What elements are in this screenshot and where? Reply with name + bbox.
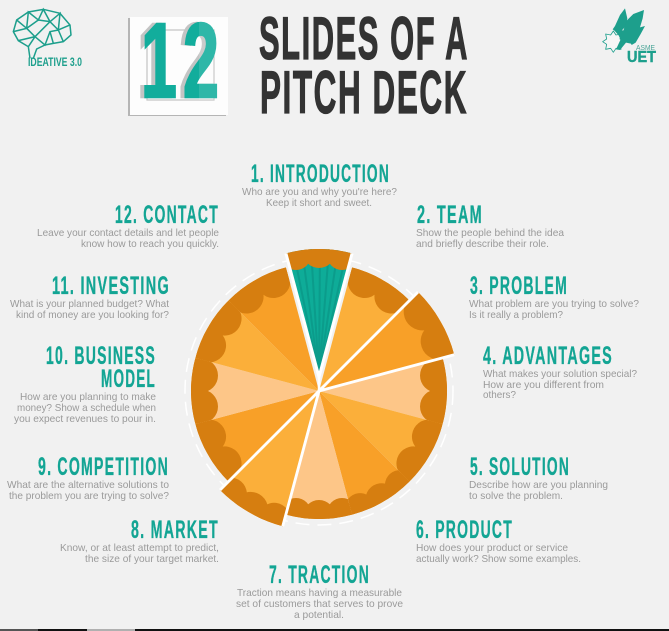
section 2: team (416, 202, 564, 250)
section 11: investing: What is your planned budget? What (10, 298, 169, 310)
section 6: product (416, 517, 581, 565)
slice 5 (154, 226, 496, 563)
section 1: introduction: 1. INTRODUCTION (251, 161, 390, 188)
logo: ASME UET: UET (627, 49, 656, 66)
section 8: market: the size of your target market. (85, 553, 219, 565)
slice 10 (184, 270, 440, 512)
section 4: advantages: What makes your solution special? (483, 368, 637, 380)
section 11: investing: kind of money are you looking for? (16, 309, 169, 321)
section 10: business model: you expect revenues to pour in. (14, 413, 156, 425)
slice 9 (142, 226, 484, 563)
section 2: team: Show the people behind the idea (416, 227, 564, 239)
section 9: competition (7, 454, 169, 502)
section 12: contact (37, 202, 219, 250)
section 8: market: Know, or at least attempt to predict, (60, 542, 219, 554)
title (259, 5, 469, 126)
section 6: product: How does your product or service (416, 542, 568, 554)
section 12: contact: know how to reach you quickly. (81, 238, 219, 250)
section 11: investing: 11. INVESTING (52, 273, 170, 300)
slice 7 (197, 269, 441, 532)
slice 4 (198, 270, 454, 512)
icon: number 12 tile: 12 (137, 2, 221, 120)
section 12: contact: 12. CONTACT (115, 202, 219, 229)
slice 6 (152, 224, 495, 574)
section 11: investing (10, 273, 170, 321)
section 5: solution (469, 454, 608, 502)
slice 12 (147, 214, 484, 556)
section 6: product: 6. PRODUCT (416, 517, 513, 544)
section 9: competition: the problem you are trying to solve? (9, 490, 169, 502)
section 2: team: 2. TEAM (417, 202, 483, 229)
slice 11 (142, 219, 484, 556)
section 8: market (60, 517, 219, 565)
section 4: advantages: others? (483, 389, 516, 401)
section 1: introduction: Who are you and why you're here? (242, 186, 397, 198)
slice 3 (pulled out) (138, 203, 513, 572)
title: SLIDES OF A (259, 5, 469, 72)
section 7: traction (236, 562, 403, 621)
logo: Ideative 3.0 brain (13, 9, 82, 69)
section 5: solution: Describe how are you planning (469, 479, 608, 491)
section 7: traction: 7. TRACTION (269, 562, 370, 589)
section 10: business model: money? Show a schedule when (17, 402, 156, 414)
section 1: introduction (242, 161, 397, 209)
section 3: problem: 3. PROBLEM (470, 273, 568, 300)
section 10: business model: MODEL (101, 366, 156, 393)
section 3: problem: Is it really a problem? (469, 309, 563, 321)
section 7: traction: a potential. (294, 609, 344, 621)
section 3: problem: What problem are you trying to solve? (469, 298, 639, 310)
bottom edge strip (0, 629, 669, 631)
section 7: traction: set of customers that serves to prove (236, 598, 403, 610)
slice 8 (pulled out) (126, 209, 501, 591)
pie chart (184, 249, 454, 526)
logo: ASME UET (603, 8, 656, 66)
title: PITCH DECK (260, 59, 468, 126)
section 5: solution: to solve the problem. (469, 490, 563, 502)
section 2: team: and briefly describe their role. (416, 238, 549, 250)
section 12: contact: Leave your contact details and let people (37, 227, 219, 239)
section 4: advantages: How are you different from (483, 379, 604, 391)
section 5: solution: 5. SOLUTION (470, 454, 570, 481)
section 1: introduction: Keep it short and sweet. (266, 197, 372, 209)
slice 1 (teal, pulled out) (284, 249, 354, 390)
logo: ASME UET: ASME (636, 43, 655, 52)
section 10: business model (14, 343, 156, 425)
slice 2 (154, 214, 491, 556)
section 7: traction: Traction means having a measurable (237, 587, 402, 599)
icon: number 12 tile (128, 2, 228, 120)
icon: number 12 tile: 12 (141, 2, 225, 120)
section 8: market: 8. MARKET (131, 517, 219, 544)
section 4: advantages (483, 343, 637, 401)
logo: Ideative 3.0 brain: IDEATIVE 3.0 (28, 57, 82, 69)
section 10: business model: How are you planning to make (20, 391, 156, 403)
section 10: business model: 10. BUSINESS (46, 343, 156, 370)
section 6: product: actually work? Show some examples. (416, 553, 581, 565)
section 9: competition: What are the alternative solutions to (7, 479, 169, 491)
section 9: competition: 9. COMPETITION (38, 454, 169, 481)
section 3: problem (469, 273, 639, 321)
